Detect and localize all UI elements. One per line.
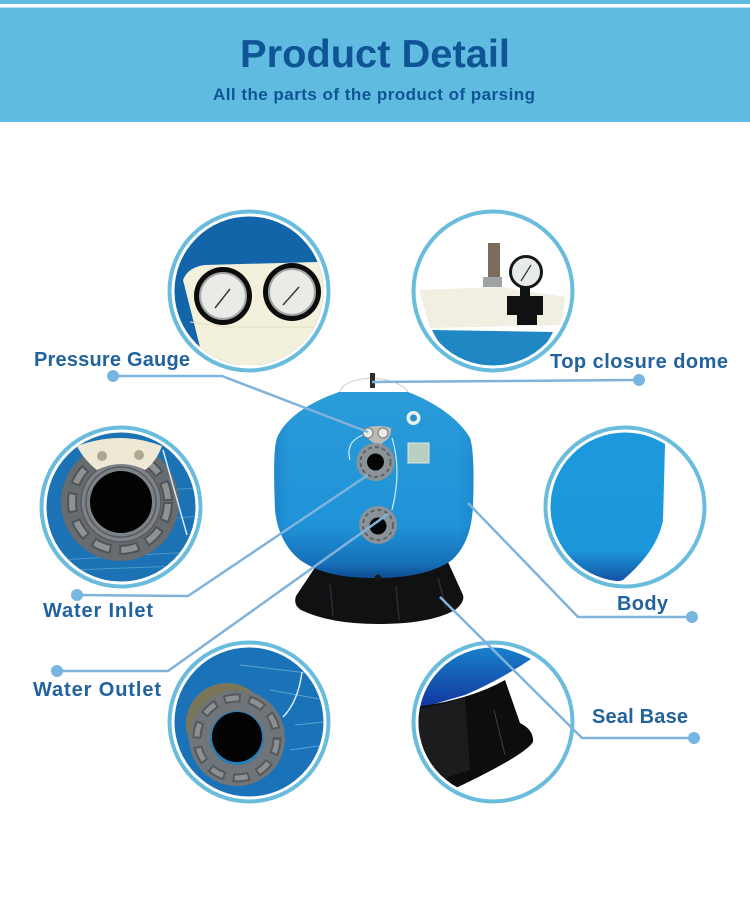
small gauge <box>510 256 542 288</box>
pipes <box>349 435 397 510</box>
upper flange <box>356 443 394 481</box>
subtitle: All the parts of the product of parsing <box>213 85 535 104</box>
panel: water outlet detail <box>170 642 330 802</box>
label: top closure dome: Top closure dome <box>550 351 728 373</box>
leader line: water outlet <box>51 514 388 677</box>
leader line: body <box>468 503 698 623</box>
gauge right <box>263 263 321 321</box>
leader line: seal base <box>440 597 700 744</box>
panel: seal base detail <box>410 640 572 802</box>
header banner <box>0 0 750 122</box>
top dome and valve <box>340 373 408 392</box>
leader line: pressure gauge <box>107 370 368 432</box>
label: water inlet: Water Inlet <box>43 600 153 622</box>
label: body: Body <box>617 593 669 615</box>
leader line: top closure dome <box>372 374 645 386</box>
gauge bracket <box>363 426 391 450</box>
bolt <box>488 243 500 278</box>
central product: filter tank <box>274 373 474 624</box>
panel: body detail <box>545 428 704 590</box>
tank body <box>274 392 474 578</box>
tank base <box>295 562 463 624</box>
label: pressure gauge: Pressure Gauge <box>34 349 190 371</box>
label: water outlet: Water Outlet <box>33 679 161 701</box>
panel: water inlet detail <box>42 428 200 586</box>
drain <box>374 574 382 582</box>
panel: pressure gauge detail <box>170 212 330 370</box>
label plate <box>408 443 429 463</box>
lower flange <box>359 506 397 544</box>
label: seal base: Seal Base <box>592 706 688 728</box>
leader line: water inlet <box>71 475 368 601</box>
top port <box>406 411 420 425</box>
gauge fitting <box>507 287 543 325</box>
title: Product Detail <box>240 33 510 76</box>
gauge left <box>194 267 252 325</box>
panel: top closure dome detail <box>414 212 572 370</box>
